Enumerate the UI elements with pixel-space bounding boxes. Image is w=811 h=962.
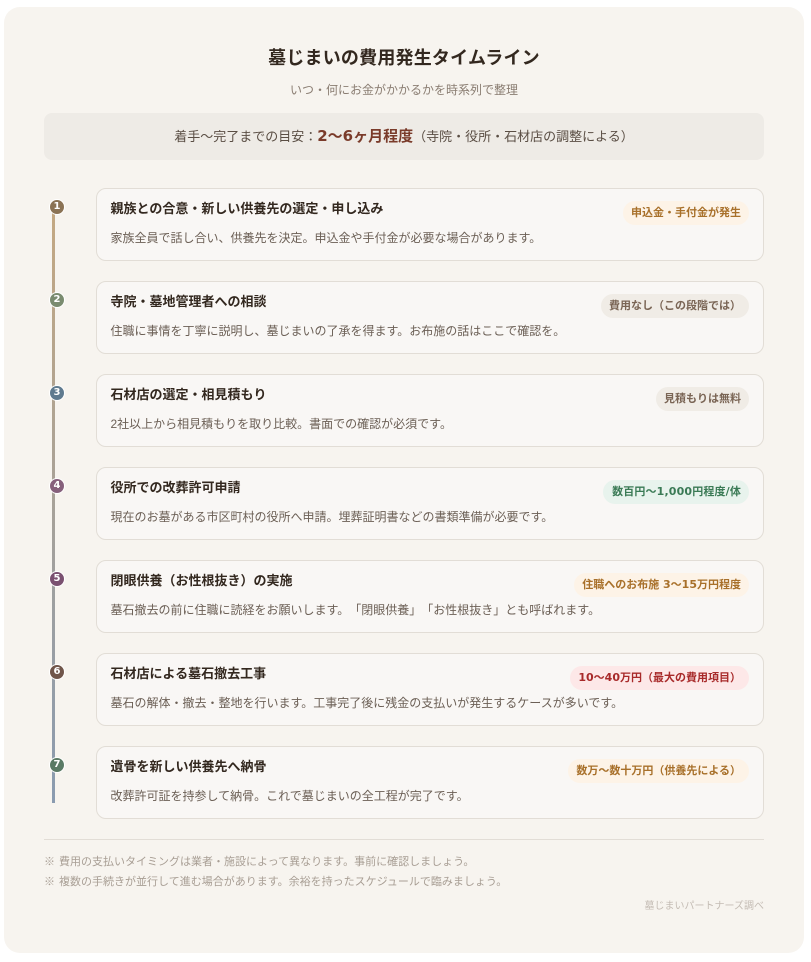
step marker 6: 6 <box>54 666 60 677</box>
step 2 cost badge: 費用なし（この段階では） <box>609 299 741 312</box>
subtitle: いつ・何にお金がかかるかを時系列で整理 <box>290 83 518 97</box>
step marker 5: 5 <box>54 573 60 584</box>
footnote 2: ※ 複数の手続きが並行して進む場合があります。余裕を持ったスケジュールで臨みましょう。 <box>44 876 507 888</box>
step 7 title: 遺骨を新しい供養先へ納骨 <box>110 759 267 774</box>
step 6 cost badge <box>570 666 749 690</box>
step 6 description: 墓石の解体・撤去・整地を行います。工事完了後に残金の支払いが発生するケースが多いです。 <box>110 696 623 710</box>
step 5 cost badge <box>574 573 749 597</box>
step marker 3: 3 <box>54 387 60 398</box>
step 1 title: 親族との合意・新しい供養先の選定・申し込み <box>110 201 383 216</box>
step marker 7: 7 <box>54 759 60 770</box>
source credit: 墓じまいパートナーズ調べ <box>644 901 764 912</box>
step marker 5 <box>49 571 65 587</box>
step card 4 <box>96 467 764 540</box>
step 2 cost badge <box>601 294 749 318</box>
step card 1 <box>96 188 764 261</box>
step 7 description: 改葬許可証を持参して納骨。これで墓じまいの全工程が完了です。 <box>110 789 469 803</box>
title: 墓じまいの費用発生タイムライン <box>268 48 540 68</box>
step marker 4: 4 <box>54 480 60 491</box>
step 2 title: 寺院・墓地管理者への相談 <box>110 294 267 309</box>
step 4 cost badge: 数百円〜1,000円程度/体 <box>612 485 741 498</box>
step 5 description: 墓石撤去の前に住職に読経をお願いします。「閉眼供養」「お性根抜き」とも呼ばれます。 <box>110 603 600 617</box>
step marker 1: 1 <box>54 201 60 212</box>
step 7 cost badge: 数万〜数十万円（供養先による） <box>576 764 741 777</box>
step 1 cost badge <box>623 201 749 225</box>
step 3 cost badge <box>656 387 749 411</box>
step card 6 <box>96 653 764 726</box>
step 4 title: 役所での改葬許可申請 <box>110 480 241 495</box>
step 4 cost badge <box>603 480 749 504</box>
step 1 description: 家族全員で話し合い、供養先を決定。申込金や手付金が必要な場合があります。 <box>110 231 541 245</box>
step marker 3 <box>49 385 65 401</box>
step marker 6 <box>49 664 65 680</box>
step card 2 <box>96 281 764 354</box>
duration banner: 着手〜完了までの目安：2〜6ヶ月程度（寺院・役所・石材店の調整による） <box>174 127 634 145</box>
step 5 cost badge: 住職へのお布施 3〜15万円程度 <box>582 578 741 591</box>
step 6 cost badge: 10〜40万円（最大の費用項目） <box>578 671 741 684</box>
footer divider <box>44 839 764 840</box>
step marker 7 <box>49 757 65 773</box>
step marker 4 <box>49 478 65 494</box>
step marker 2 <box>49 292 65 308</box>
footnote 1: ※ 費用の支払いタイミングは業者・施設によって異なります。事前に確認しましょう。 <box>44 856 474 868</box>
step 7 cost badge <box>568 759 749 783</box>
step 4 description: 現在のお墓がある市区町村の役所へ申請。埋葬証明書などの書類準備が必要です。 <box>110 510 553 524</box>
step 5 title: 閉眼供養（お性根抜き）の実施 <box>110 573 293 588</box>
step 1 cost badge: 申込金・手付金が発生 <box>631 206 741 219</box>
timeline line <box>52 207 55 803</box>
step 6 title: 石材店による墓石撤去工事 <box>110 666 266 681</box>
duration banner <box>44 113 764 160</box>
step marker 1 <box>49 199 65 215</box>
step 3 cost badge: 見積もりは無料 <box>664 392 741 405</box>
step card 3 <box>96 374 764 447</box>
step card 5 <box>96 560 764 633</box>
step 3 title: 石材店の選定・相見積もり <box>110 387 267 402</box>
step marker 2: 2 <box>54 294 60 305</box>
step 3 description: 2社以上から相見積もりを取り比較。書面での確認が必須です。 <box>110 417 452 431</box>
step card 7 <box>96 746 764 819</box>
step 2 description: 住職に事情を丁寧に説明し、墓じまいの了承を得ます。お布施の話はここで確認を。 <box>110 324 565 338</box>
